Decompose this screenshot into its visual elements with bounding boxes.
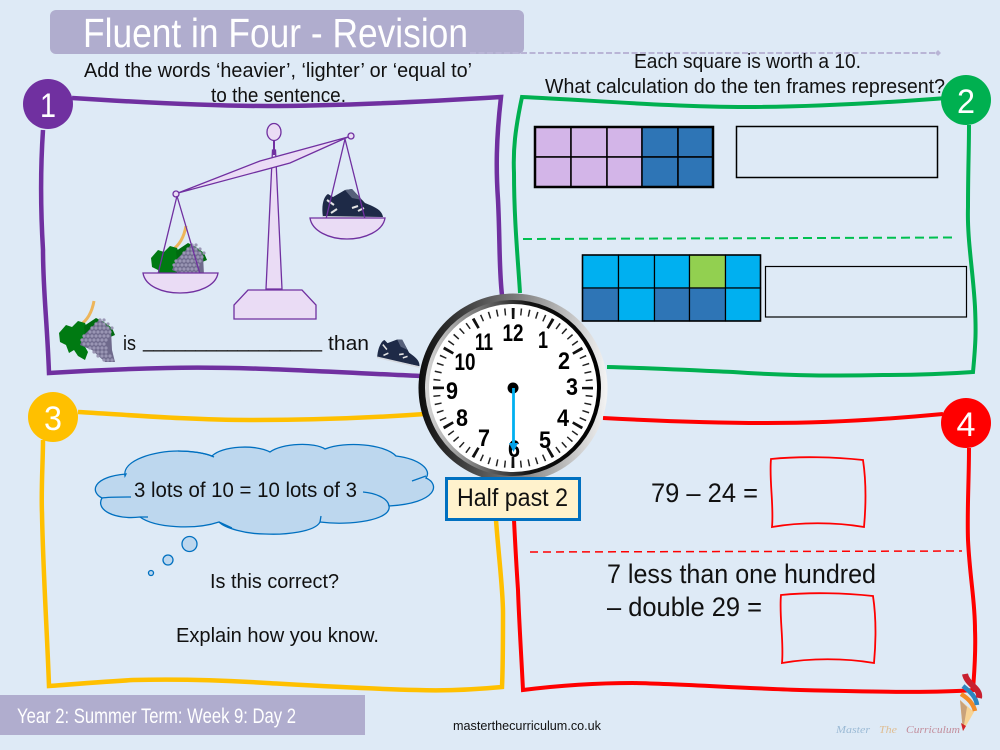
analogue clock: 7 <box>478 425 490 452</box>
time label: Half past 2 <box>457 484 568 512</box>
answer box 4b <box>781 593 875 663</box>
panel 2: ten frames <box>514 51 991 376</box>
logo wordmark: Curriculum <box>906 724 960 736</box>
logo: pencil <box>960 674 979 731</box>
sentence with icons: is <box>123 333 136 355</box>
number badge 2 <box>941 75 991 125</box>
number badge 1 <box>23 79 73 129</box>
analogue clock: 4 <box>557 405 570 432</box>
instruction 2 <box>545 51 945 98</box>
calculation 2: – double 29 = <box>607 592 762 622</box>
number badge 4 <box>941 398 991 448</box>
instruction 2: What calculation do the ten frames represent? <box>545 76 945 98</box>
answer box 2b <box>766 266 966 317</box>
question text: Explain how you know. <box>176 625 379 647</box>
logo wordmark: Master <box>835 724 871 736</box>
time label <box>446 478 580 520</box>
question text <box>176 571 379 647</box>
instruction 2: Each square is worth a 10. <box>634 51 861 73</box>
logo wordmark <box>835 724 960 736</box>
icon: shoe on pan <box>322 189 383 218</box>
sentence with icons: _________________ <box>142 330 323 352</box>
instruction 1: Add the words ‘heavier’, ‘lighter’ or ‘equal to’ <box>84 60 472 82</box>
answer box 2a <box>736 126 938 178</box>
calculation 2 <box>607 559 876 622</box>
analogue clock: 11 <box>475 329 493 356</box>
analogue clock: 2 <box>558 348 570 375</box>
sentence with icons <box>59 301 424 367</box>
analogue clock: 6 <box>508 436 520 463</box>
analogue clock: 3 <box>566 374 578 401</box>
cloud statement: 3 lots of 10 = 10 lots of 3 <box>134 479 357 502</box>
panel 1: scales <box>23 60 503 380</box>
number badge 1: 1 <box>40 87 56 125</box>
question text: Is this correct? <box>210 571 339 593</box>
thought cloud <box>95 444 434 576</box>
instruction 1 <box>84 60 472 107</box>
number badge 3: 3 <box>44 400 62 438</box>
panel 3 frame <box>42 412 503 690</box>
analogue clock: 9 <box>446 378 458 405</box>
icon: grapes on pan <box>151 226 207 287</box>
number badge 3 <box>28 392 78 442</box>
panel 3: reasoning <box>28 392 503 690</box>
answer box 4a <box>771 457 865 527</box>
panel 4 frame <box>514 414 975 692</box>
calculation 2: 7 less than one hundred <box>607 559 876 589</box>
balance scales <box>143 124 385 319</box>
analogue clock: 5 <box>539 427 551 454</box>
panel 1 frame <box>41 97 503 380</box>
analogue clock: 12 <box>502 320 524 347</box>
title banner: Fluent in Four - Revision <box>83 10 468 56</box>
analogue clock: 8 <box>456 405 468 432</box>
calculation 1: 79 – 24 = <box>651 478 758 508</box>
analogue clock: 10 <box>454 349 476 376</box>
logo wordmark: The <box>879 724 897 736</box>
ten frame 2 <box>582 255 760 321</box>
sentence with icons: than <box>328 333 369 355</box>
panel 2 frame <box>514 97 976 376</box>
instruction 1: to the sentence. <box>211 85 346 107</box>
footer bar: Year 2: Summer Term: Week 9: Day 2 <box>17 705 296 728</box>
number badge 2: 2 <box>957 83 975 121</box>
panel 4: calculations <box>514 398 991 692</box>
analogue clock <box>418 294 608 482</box>
analogue clock: 1 <box>538 327 548 354</box>
footer bar <box>0 695 365 735</box>
website: masterthecurriculum.co.uk <box>453 719 602 733</box>
number badge 4: 4 <box>956 406 976 444</box>
ten frame 1 <box>535 127 713 187</box>
